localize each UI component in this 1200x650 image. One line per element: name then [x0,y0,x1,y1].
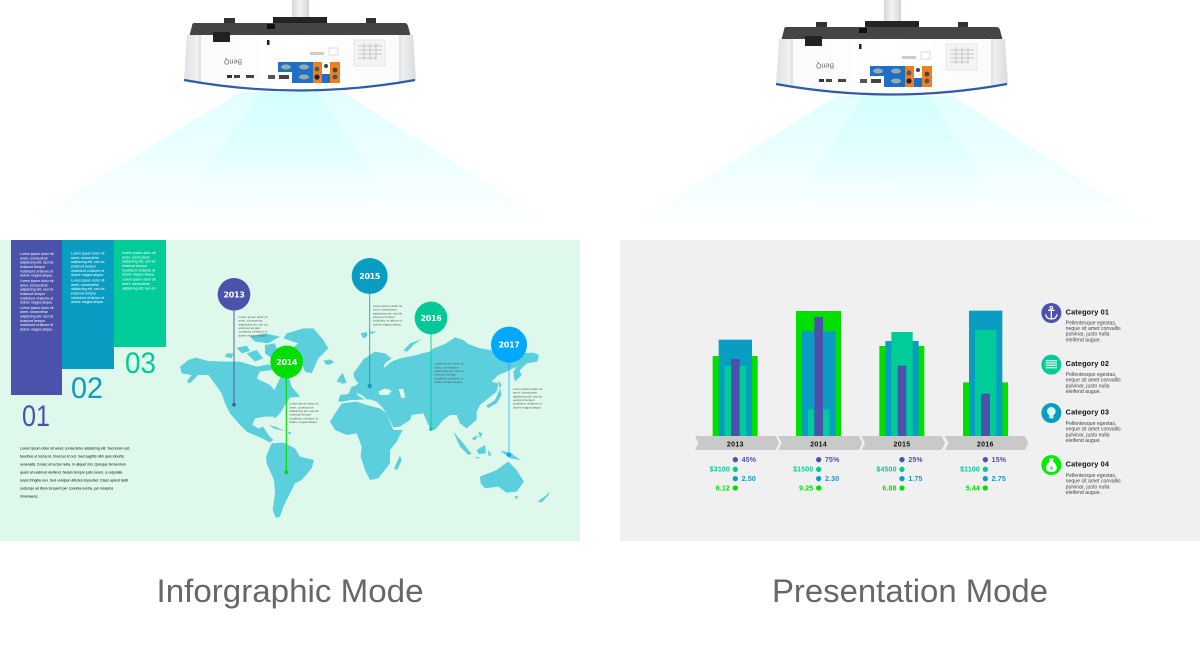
column 01: adipiscing elit, sed do [20,315,54,319]
pin 2016 [415,302,464,431]
timeline arrow 2014 [778,436,862,450]
column 01: eiusmod tempor [20,319,46,323]
category 04: Pellentesque egestas, [1066,473,1116,479]
values 2013: 45% [742,457,757,464]
pin 2013: incididunt ut labore et [238,330,267,334]
category 01: eleifend augue. [1066,337,1101,343]
column 02 [62,240,114,405]
column 02: incididunt ut labore et [71,269,104,273]
column 02: incididunt ut labore et [71,296,104,300]
column 03 [114,240,166,380]
world map [180,328,549,518]
category 01: pulvinar, justo nulla [1066,332,1110,338]
bars 2014 [796,311,841,436]
column 01: Lorem ipsum dolor sit [20,252,53,256]
column 03: amet, consectetur [122,255,151,259]
values 2013 [710,457,757,492]
column 01: amet, consectetur [20,310,49,314]
column 03: adipiscing elit, sed do [122,286,156,290]
pin 2017: 2017 [499,341,519,350]
pin 2014: amet, consectetur [289,405,314,409]
column 01: Lorem ipsum dolor sit [20,306,53,310]
pin 2014: eiusmod tempor [289,413,311,417]
panel: presentation mode screen [620,240,1200,541]
pin 2017: Lorem ipsum dolor sit [513,387,542,391]
values 2016: 2.75 [992,476,1006,483]
column 03: adipiscing elit, sed do [122,260,156,264]
values 2013: $3100 [710,467,730,474]
category 01: Pellentesque egestas, [1066,320,1116,326]
bars 2013 [713,340,758,436]
timeline arrow 2016 [945,436,1028,450]
column 03: eiusmod tempor [122,264,148,268]
pin 2017: adipiscing elit, sed do [513,394,542,398]
panel: infographic mode screen [0,240,580,541]
bars 2016 [963,311,1008,436]
values 2014: $1500 [793,467,813,474]
values 2014: 9.25 [799,485,813,492]
category 03: Pellentesque egestas, [1066,421,1116,427]
column 01: incididunt ut labore et [20,323,53,327]
pin 2013: Lorem ipsum dolor sit [238,315,268,319]
column 02: amet, consectetur [71,256,100,260]
timeline arrow 2014: 2014 [810,441,827,448]
light beam: left projector [20,92,556,226]
pin 2015: 2015 [359,272,380,281]
pin 2017: eiusmod tempor [513,398,535,402]
pin 2016: eiusmod tempor [434,373,456,377]
world map with timeline pins [180,258,549,518]
values 2015: 6.88 [882,485,897,492]
pin 2016: incididunt ut labore et [434,376,463,380]
category 02 [1041,355,1121,395]
category 04 [1041,455,1121,496]
category 03 [1041,403,1121,444]
pin 2015: amet, consectetur [373,308,397,312]
category 02: Pellentesque egestas, [1066,372,1116,378]
bar chart with timeline [695,311,1028,492]
column 03: Lorem ipsum dolor sit [122,278,155,282]
caption: right: Presentation Mode [772,573,1048,609]
pin 2013: adipiscing elit, sed do [238,322,268,326]
timeline arrow 2015 [862,436,945,450]
pin 2015: dolore magna aliqua. [373,322,402,326]
column 01: adipiscing elit, sed do [20,261,54,265]
column 01 [11,240,62,433]
text block: paragraph: himenaeos. [20,494,38,498]
category 01 [1041,303,1121,343]
category 04: Category 04 [1066,460,1110,469]
pin 2014: 2014 [276,358,298,367]
values 2016: $1100 [960,467,980,474]
pin 2016: amet, consectetur [434,365,459,369]
caption: left: Inforgraphic Mode [156,573,424,609]
column 01: dolore magna aliqua. [20,301,53,305]
column 01: dolore magna aliqua. [20,328,53,332]
column 03: dolore magna aliqua. [122,273,155,277]
column 01: amet, consectetur [20,283,49,287]
text block: paragraph: turpis fringilla non. Sed volutpat ultricies imperdiet. Class aptent taciti [20,478,128,482]
column 01: incididunt ut labore et [20,296,53,300]
text block: paragraph: sociosqu ad litora torquent per conubia nostra, per inceptos [20,486,113,490]
pin 2014: Lorem ipsum dolor sit [289,402,319,406]
column 02: 02 [71,372,103,405]
text block: paragraph: venenatis. Donec at luctus nulla, in aliquet nisl. Quisque fermentum [20,462,126,466]
values 2014: 2.30 [825,476,839,483]
values 2016: 15% [992,457,1007,464]
column 02: eiusmod tempor [71,264,97,268]
values 2014 [793,457,840,492]
values 2013: 6.12 [716,485,730,492]
category 02: Category 02 [1066,359,1109,368]
pin 2015: adipiscing elit, sed do [373,311,402,315]
pin 2014: adipiscing elit, sed do [289,409,319,413]
values 2014: 75% [825,457,840,464]
timeline arrow 2015: 2015 [894,441,910,448]
values 2015: 1.75 [908,476,923,483]
column 01: Lorem ipsum dolor sit [20,279,53,283]
projector: right [776,0,1008,94]
pin 2017: dolore magna aliqua. [513,405,542,409]
pin 2016: 2016 [421,314,442,323]
timeline arrow 2013 [695,436,779,450]
category 02: neque sit amet convallis [1066,378,1121,384]
category 03: neque sit amet convallis [1066,427,1121,433]
timeline arrow 2016: 2016 [977,441,994,448]
column 01: adipiscing elit, sed do [20,288,54,292]
category 01: Category 01 [1066,307,1109,316]
pin 2016: adipiscing elit, sed do [434,369,464,373]
category 04: eleifend augue. [1066,490,1101,496]
category 03: pulvinar, justo nulla [1066,432,1110,438]
pin 2013: amet, consectetur [238,319,263,323]
pin 2017: amet, consectetur [513,391,537,395]
values 2015 [876,457,923,492]
pin 2017 [491,327,542,457]
category 04: pulvinar, justo nulla [1066,484,1110,490]
pin 2015: eiusmod tempor [373,315,395,319]
column 03: amet, consectetur [122,282,151,286]
bars 2015 [879,332,924,436]
projector: right: BenQ [815,62,834,68]
column 01: eiusmod tempor [20,265,46,269]
pin 2014: incididunt ut labore et [289,416,318,420]
pin 2016: Lorem ipsum dolor sit [434,362,464,366]
text block: paragraph: faucibus ut luctus id, rhoncus id orci. Sed sagittis nibh quis lobortis [20,454,124,458]
column 02: eiusmod tempor [71,291,97,295]
category 02: pulvinar, justo nulla [1066,383,1110,389]
pin 2013: dolore magna aliqua. [238,333,267,337]
values 2013: 2.50 [742,476,756,483]
column 03: incididunt ut labore et [122,268,155,272]
inland seas [357,388,405,403]
column 01: eiusmod tempor [20,292,46,296]
column 02: Lorem ipsum dolor sit [71,278,104,282]
pin 2015: Lorem ipsum dolor sit [373,304,402,308]
column 03: 03 [125,347,156,380]
projector: left [184,0,416,90]
pin 2016: dolore magna aliqua. [434,380,463,384]
text block: paragraph: Lorem ipsum dolor sit amet, consectetur adipiscing elit. Sed lorem est, [20,446,130,450]
text block: paragraph: quam at euismod eleifend. Nulam tempor justo lorem, a vulputate [20,470,123,474]
category 01: neque sit amet convallis [1066,326,1121,332]
column 02: adipiscing elit, sed do [71,260,105,264]
light beam: right projector [628,96,1152,226]
pin 2014 [270,346,319,474]
pin 2015: incididunt ut labore et [373,319,402,323]
column 02: amet, consectetur [71,283,100,287]
values 2016: 5.44 [966,485,980,492]
legend: categories [1041,303,1121,496]
category 04: $ [1050,466,1053,472]
column 01: amet, consectetur [20,256,49,260]
column 01: 01 [22,400,50,433]
column 03: Lorem ipsum dolor sit [122,251,155,255]
pin 2013 [218,278,268,406]
pin 2014: dolore magna aliqua. [289,420,318,424]
column 02: Lorem ipsum dolor sit [71,252,104,256]
values 2015: 25% [908,457,923,464]
category 04: neque sit amet convallis [1066,479,1121,485]
pin 2015 [352,258,402,388]
projector: left: BenQ [223,58,242,64]
column 01: dolore magna aliqua. [20,274,53,278]
category 02: eleifend augue. [1066,389,1101,395]
column 02: dolore magna aliqua. [71,273,104,277]
pin 2013: 2013 [224,291,244,300]
category 03: eleifend augue. [1066,438,1101,444]
pin 2017: incididunt ut labore et [513,402,542,406]
pin 2013: eiusmod tempor [238,326,260,330]
column 02: adipiscing elit, sed do [71,287,105,291]
timeline arrow 2013: 2013 [727,441,744,448]
values 2016 [960,457,1007,492]
column 01: incididunt ut labore et [20,269,53,273]
values 2015: $4500 [876,467,897,474]
column 02: dolore magna aliqua. [71,300,104,304]
category 03: Category 03 [1066,408,1109,417]
